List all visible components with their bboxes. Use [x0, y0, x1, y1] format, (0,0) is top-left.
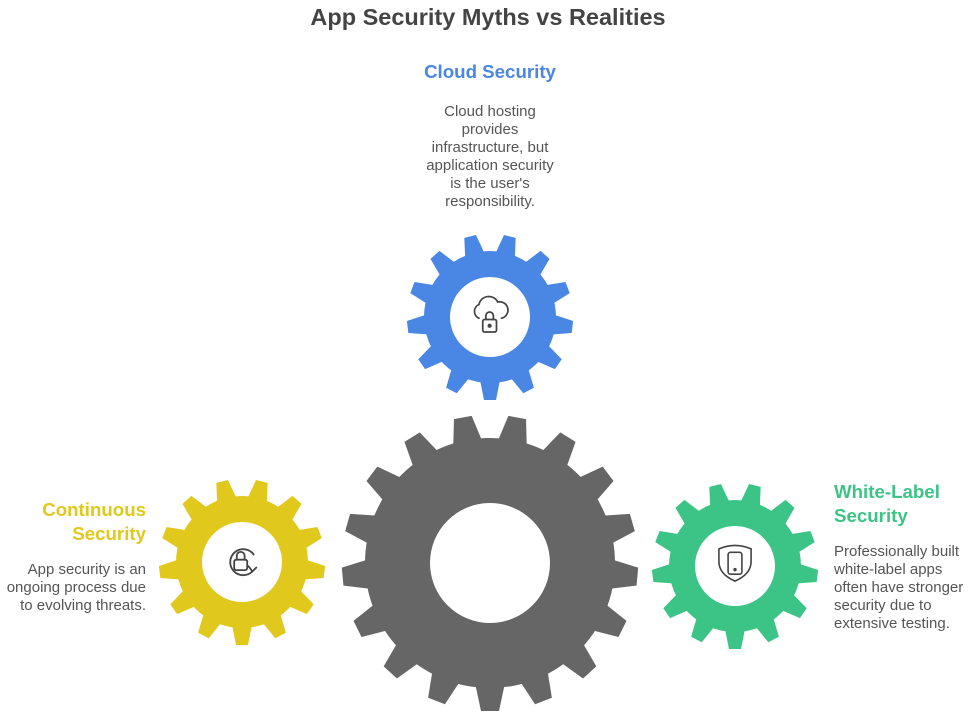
icon: shield phone: [719, 545, 751, 581]
title: App Security Myths vs Realities: [310, 4, 666, 30]
body: cloud security: provides: [462, 121, 518, 138]
heading: white-label security: Security: [834, 505, 908, 526]
body: cloud security: [426, 103, 554, 210]
heading: white-label security: [834, 481, 940, 526]
body: white-label security: Professionally built: [834, 543, 959, 560]
icon: cloud lock: [474, 296, 508, 332]
body: cloud security: responsibility.: [445, 193, 535, 210]
heading: continuous security: [42, 499, 146, 544]
body: cloud security: is the user's: [450, 175, 530, 192]
body: white-label security: [834, 543, 963, 632]
body: cloud security: application security: [426, 157, 554, 174]
text block: continuous security: [7, 499, 146, 614]
text block: white-label security: [834, 481, 963, 632]
heading: continuous security: Security: [72, 523, 146, 544]
text block: cloud security: [424, 61, 556, 210]
body: white-label security: extensive testing.: [834, 615, 950, 632]
heading: continuous security: Continuous: [42, 499, 146, 520]
green gear: white-label security: [651, 483, 819, 649]
body: continuous security: ongoing process due: [7, 579, 146, 596]
heading: white-label security: White-Label: [834, 481, 940, 502]
body: white-label security: often have stronger: [834, 579, 963, 596]
heading: cloud security: Cloud Security: [424, 61, 556, 82]
body: continuous security: [7, 561, 146, 614]
body: continuous security: to evolving threats.: [20, 597, 146, 614]
big gray gear: [341, 415, 639, 711]
body: white-label security: white-label apps: [834, 561, 942, 578]
body: white-label security: security due to: [834, 597, 932, 614]
yellow gear: continuous security: [158, 479, 326, 645]
body: cloud security: infrastructure, but: [432, 139, 548, 156]
body: continuous security: App security is an: [28, 561, 146, 578]
icon: lock with rotate arrow: [230, 549, 256, 575]
blue gear: cloud security: [406, 234, 574, 400]
body: cloud security: Cloud hosting: [444, 103, 536, 120]
